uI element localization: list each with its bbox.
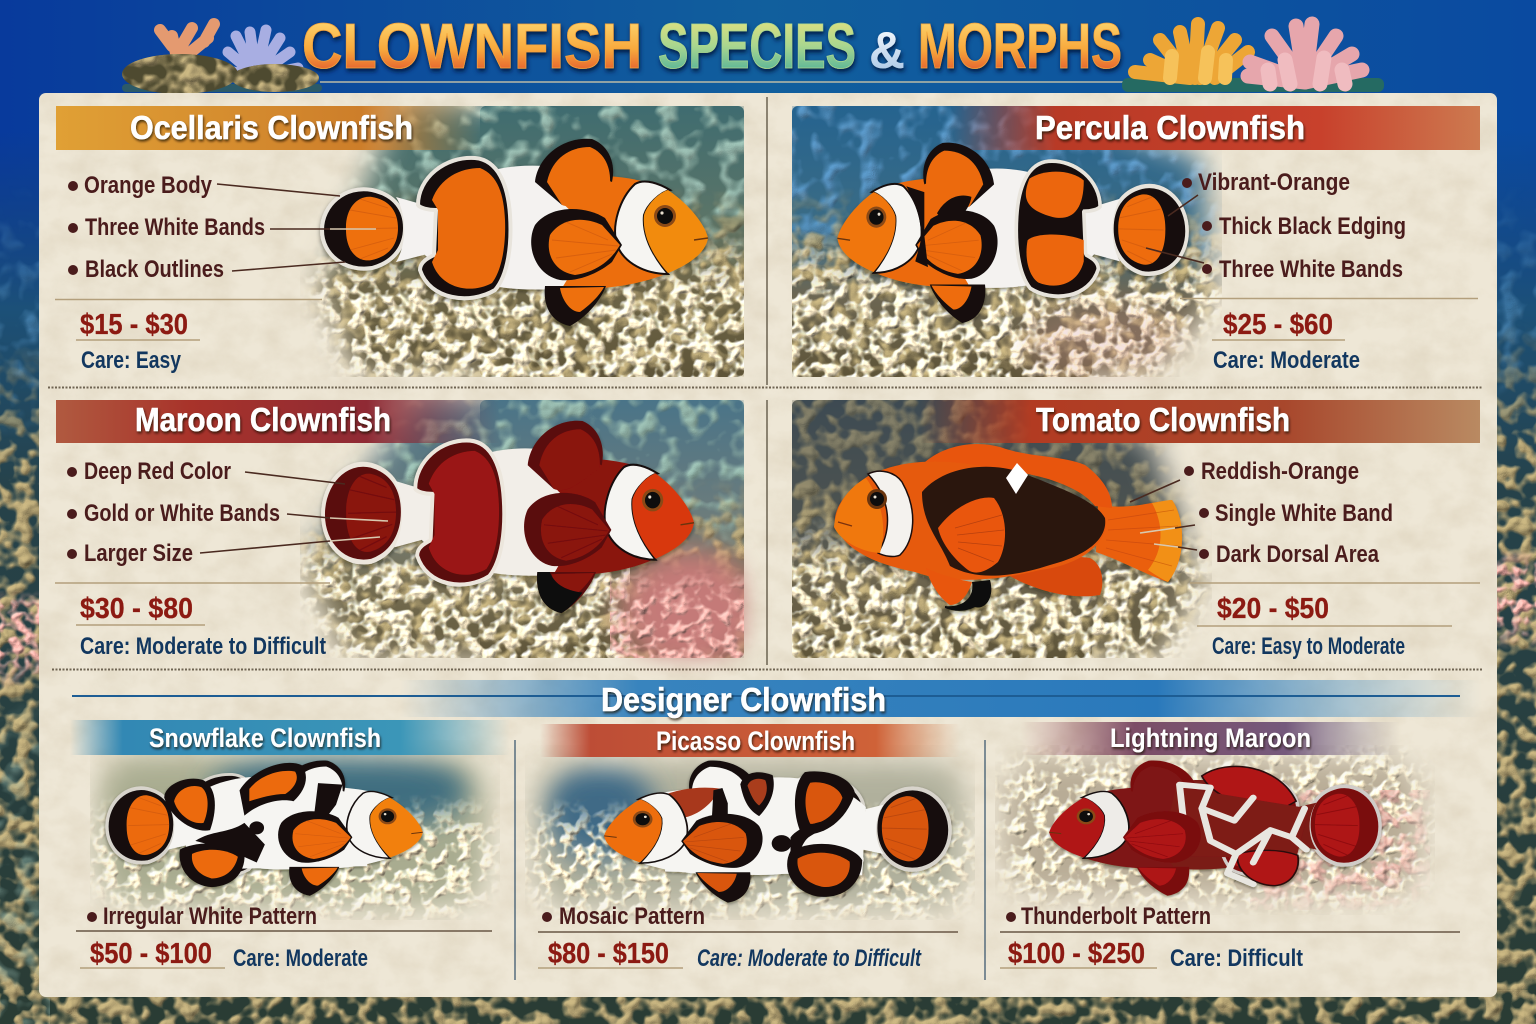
price: $25 - $60 [1223, 309, 1333, 341]
panel: ocellaris clownfish [55, 106, 744, 377]
reef scene [300, 400, 760, 670]
care level: Care: Easy to Moderate [1212, 633, 1405, 660]
title: MORPHS [918, 10, 1122, 82]
panel: snowflake clownfish [70, 720, 510, 972]
heading: Snowflake Clownfish [149, 723, 381, 753]
fish illustration [107, 761, 423, 896]
feature list: Thunderbolt Pattern [1021, 903, 1211, 930]
feature list [67, 458, 388, 567]
icon: left coral cluster [120, 24, 325, 94]
price: $100 - $250 [1008, 938, 1145, 970]
title [302, 10, 1122, 82]
title: & [869, 22, 905, 80]
feature list: Irregular White Pattern [103, 903, 317, 930]
panel: maroon clownfish [55, 400, 760, 670]
heading: Tomato Clownfish [1036, 401, 1290, 438]
heading band [56, 106, 480, 150]
heading: Maroon Clownfish [135, 401, 391, 438]
heading band [70, 720, 510, 755]
fish illustration [322, 139, 708, 326]
care level: Care: Moderate [1213, 347, 1360, 374]
feature list: Dark Dorsal Area [1216, 541, 1380, 568]
fish illustration [837, 143, 1187, 323]
feature list: Three White Bands [85, 214, 265, 241]
fish illustration [604, 760, 950, 903]
heading band [1020, 722, 1400, 755]
care level: Care: Moderate [233, 945, 368, 972]
icon: right coral cluster [1122, 24, 1384, 92]
heading: Percula Clownfish [1035, 109, 1305, 146]
panel: percula clownfish [792, 106, 1480, 385]
price: $50 - $100 [90, 938, 212, 970]
fish illustration [323, 421, 694, 613]
feature list: Thick Black Edging [1219, 213, 1406, 240]
fish illustration [834, 444, 1182, 611]
feature list: Black Outlines [85, 256, 224, 283]
care level: Care: Easy [81, 347, 182, 374]
panel: picasso clownfish [525, 724, 975, 972]
price: $30 - $80 [80, 593, 193, 625]
heading band [540, 724, 960, 757]
feature list [1130, 458, 1393, 568]
reef scene [995, 745, 1435, 915]
section: designer clownfish heading: Designer Clownfish [601, 681, 886, 718]
care level: Care: Difficult [1170, 945, 1303, 972]
feature list [68, 172, 376, 283]
reef scene [525, 745, 975, 920]
heading band [920, 400, 1480, 443]
heading: Ocellaris Clownfish [130, 109, 413, 146]
price: $15 - $30 [80, 309, 188, 341]
care level: Care: Moderate to Difficult [80, 633, 326, 660]
section: designer clownfish heading [72, 680, 1482, 718]
feature list: Orange Body [84, 172, 213, 199]
reef scene [792, 106, 1222, 385]
feature list: Mosaic Pattern [559, 903, 705, 930]
panel: lightning maroon [995, 722, 1460, 972]
feature list: Deep Red Color [84, 458, 231, 485]
reef scene [300, 106, 744, 377]
feature list: Three White Bands [1219, 256, 1403, 283]
feature list: Vibrant-Orange [1198, 169, 1350, 196]
fish illustration [1049, 761, 1380, 896]
price: $80 - $150 [548, 938, 669, 970]
feature list [1146, 169, 1406, 283]
feature list: Gold or White Bands [84, 500, 280, 527]
title: CLOWNFISH [302, 10, 642, 82]
heading band [56, 400, 500, 443]
feature list: Single White Band [1215, 500, 1393, 527]
title: SPECIES [658, 10, 856, 82]
price: $20 - $50 [1217, 593, 1329, 625]
feature list: Larger Size [84, 540, 193, 567]
panel: tomato clownfish [792, 400, 1480, 660]
care level: Care: Moderate to Difficult [697, 945, 922, 972]
reef scene [792, 400, 1212, 658]
heading band [950, 106, 1480, 150]
heading: Picasso Clownfish [656, 726, 855, 756]
heading: Lightning Maroon [1110, 723, 1311, 753]
reef scene [90, 740, 500, 920]
feature list: Reddish-Orange [1201, 458, 1359, 485]
